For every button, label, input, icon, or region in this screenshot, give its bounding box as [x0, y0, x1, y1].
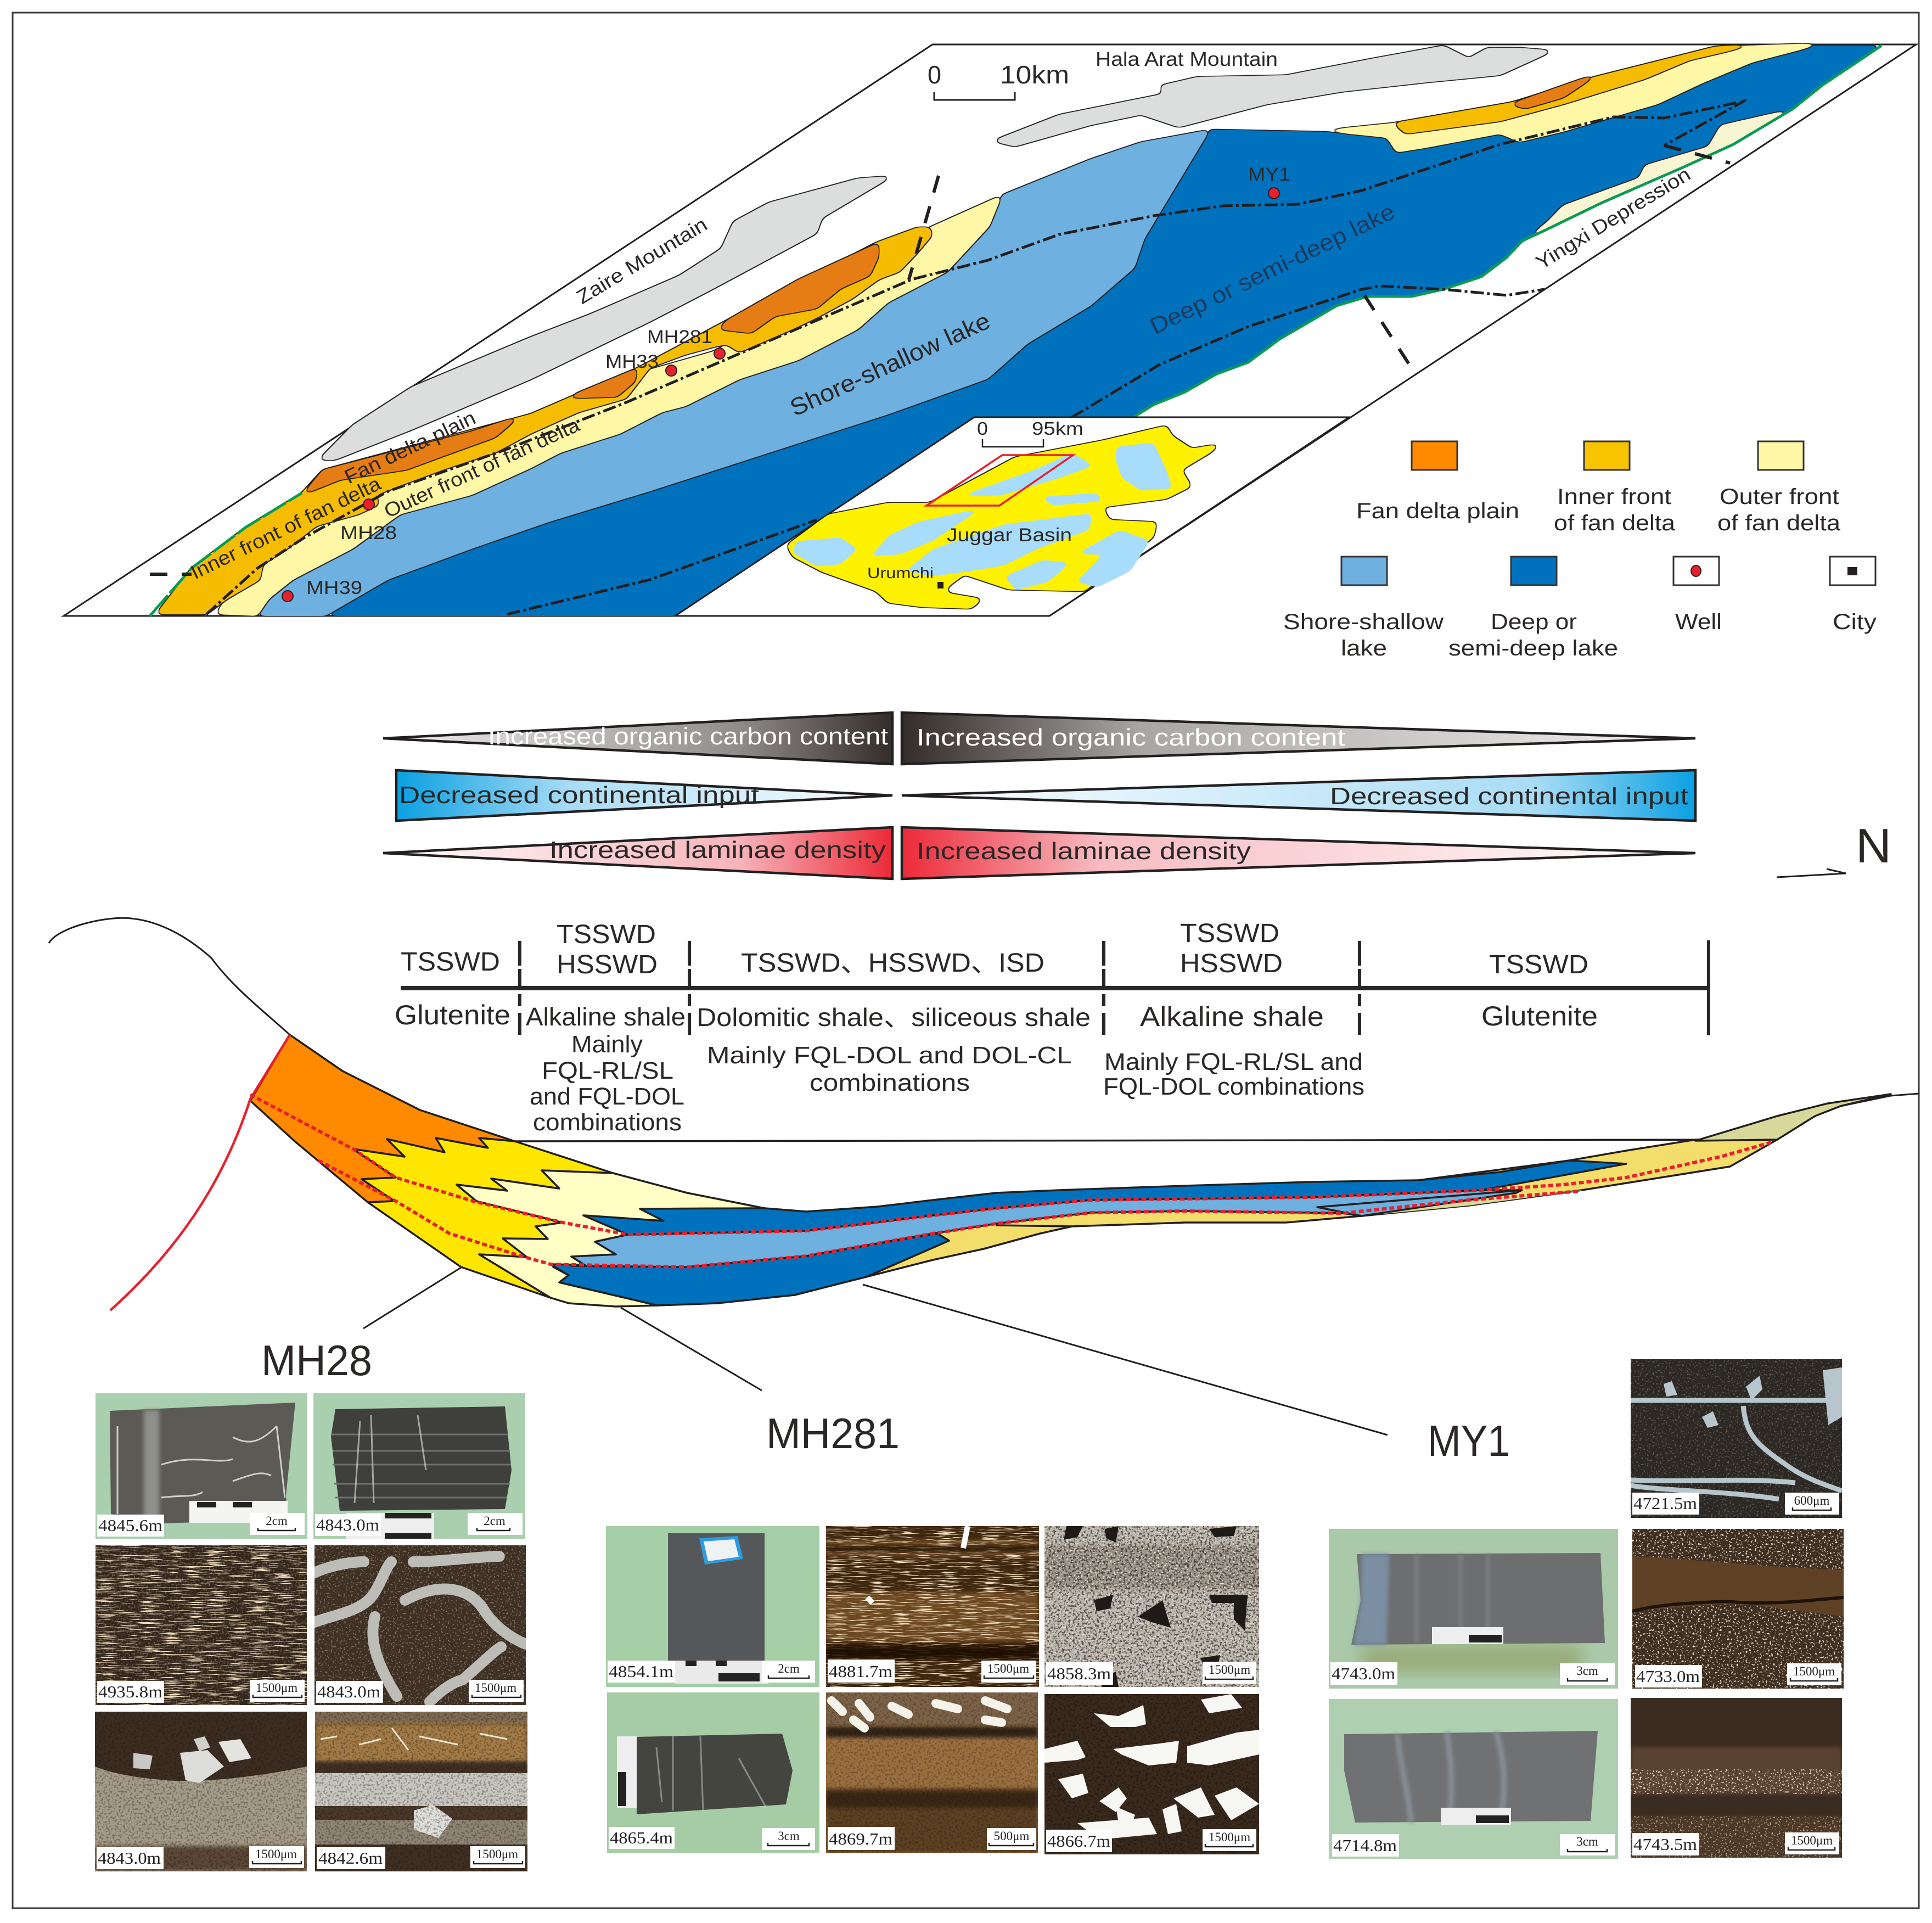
legend: inner front: Inner front — [1557, 485, 1671, 509]
photo 4845.6m — [96, 1393, 307, 1539]
photo 4843.0m vein: 4843.0m — [317, 1682, 380, 1701]
green west margin — [150, 493, 302, 616]
legend: city — [1830, 557, 1877, 634]
facies: deep or semi-deep lake — [325, 46, 1882, 616]
label: Yingxi Depression: Yingxi Depression — [1532, 162, 1694, 274]
panel: sedimentary facies map — [64, 43, 1916, 616]
facies: fan delta plain west — [302, 368, 638, 495]
basin outline — [787, 425, 1221, 609]
legend: fan delta plain: Fan delta plain — [1356, 499, 1519, 523]
map parallelogram outline — [64, 44, 1916, 616]
photo 4858.3m: 1500μm — [1209, 1663, 1250, 1677]
TSSWD HSSWD column 4: TSSWD — [1180, 919, 1279, 948]
facies: khaki distal wedge — [1695, 1094, 1891, 1141]
mountain profile — [49, 918, 290, 1035]
TSSWD HSSWD column 2: TSSWD — [557, 920, 656, 949]
red dashed upper boundary — [250, 1095, 1771, 1235]
photo 4858.3m — [1044, 1526, 1259, 1687]
photo 4714.8m core — [1329, 1699, 1618, 1859]
photo 4866.7m — [1044, 1694, 1259, 1854]
facies: fan delta plain central — [718, 243, 879, 333]
legend: outer front: Outer front — [1720, 485, 1839, 509]
well MH281: MH281 — [647, 327, 712, 347]
photo 4733.0m: 1500μm — [1793, 1664, 1835, 1678]
photo 4843.0m vein — [314, 1545, 526, 1705]
panel: Juggar Basin inset map — [675, 417, 1349, 616]
wedge: laminae density right: Increased laminae density — [917, 838, 1251, 865]
mountain: Zaire — [318, 176, 894, 460]
photo 4843.0m crystals: 1500μm — [255, 1847, 297, 1861]
photo 4935.8m: 1500μm — [256, 1681, 297, 1695]
photo 4854.1m: 2cm — [778, 1662, 800, 1675]
panel: MH281 core photos — [606, 1526, 1259, 1854]
inset scale bar: 0 — [977, 418, 988, 439]
combinations column 4: Mainly FQL-RL/SL and — [1104, 1049, 1363, 1075]
photo 4843.0m crystals — [95, 1712, 307, 1871]
wedge: organic carbon right: Increased organic carbon content — [917, 724, 1345, 751]
photo 4843.0m crystals: 4843.0m — [98, 1848, 161, 1868]
combinations column 3: Mainly FQL-DOL and DOL-CL — [707, 1042, 1072, 1069]
photo 4743.5m: 1500μm — [1791, 1834, 1833, 1847]
scale bar 10 km: 10km — [1000, 60, 1069, 89]
facies: eastern outer front — [1317, 43, 1828, 153]
wedge: continental input left: Decreased continental input — [399, 782, 759, 809]
legend: well: Well — [1675, 610, 1722, 634]
Dolomitic and siliceous shale: Dolomitic shale、siliceous shale — [697, 1003, 1091, 1031]
label: Shore-shallow lake: Shore-shallow lake — [786, 307, 995, 422]
well label MY1: MY1 — [1428, 1416, 1510, 1465]
label: Zaire Mountain: Zaire Mountain — [572, 213, 711, 309]
well MH281 — [647, 327, 725, 359]
wedge: continental input right: Decreased continental input — [1330, 783, 1688, 810]
photo 4842.6m: 1500μm — [476, 1847, 518, 1861]
dash-dot arrow east — [1664, 100, 1746, 145]
inset scale bar: 95km — [1032, 418, 1083, 439]
photo 4865.4m — [607, 1692, 819, 1853]
legend: inner front: of fan delta — [1554, 511, 1676, 535]
legend: inner front — [1554, 441, 1676, 535]
legend: shore-shallow lake: lake — [1341, 636, 1387, 660]
lake level line — [515, 1140, 1777, 1141]
legend: shore-shallow lake: Shore-shallow — [1283, 610, 1444, 634]
photo 4733.0m — [1632, 1529, 1844, 1689]
label: Outer front of fan delta: Outer front of fan delta — [380, 413, 583, 522]
photo 4845.6m: 4845.6m — [98, 1516, 162, 1535]
photo 4881.7m — [826, 1526, 1039, 1687]
well MY1 — [1248, 164, 1290, 199]
photo 4721.5m: 600μm — [1794, 1494, 1829, 1507]
leader line MY1 — [863, 1285, 1388, 1435]
facies: deep lake lower body — [551, 1234, 949, 1305]
well MH39: MH39 — [306, 578, 362, 598]
facies: fan outer pale — [457, 1170, 765, 1307]
photo 4869.7m: 4869.7m — [829, 1829, 892, 1848]
photo 4721.5m — [1631, 1359, 1842, 1518]
column dividers — [520, 941, 1360, 1035]
legend: city: City — [1833, 610, 1877, 634]
basin floor profile — [1840, 1094, 1919, 1106]
photo 4881.7m: 4881.7m — [829, 1662, 892, 1681]
wedge: organic carbon left: Increased organic carbon content — [488, 723, 888, 750]
photo 4843.0m vein: 1500μm — [475, 1681, 516, 1695]
photo 4842.6m: 4842.6m — [318, 1848, 383, 1868]
facies: inner front of fan delta — [156, 227, 933, 614]
Glutenite right: Glutenite — [1481, 1001, 1598, 1031]
panel: lithology table — [395, 919, 1709, 1136]
dash-dot boundary north — [206, 102, 1739, 614]
facies: fan inner yellow — [353, 1138, 613, 1298]
photo 4842.6m — [315, 1712, 527, 1871]
photo 4858.3m: 4858.3m — [1047, 1664, 1111, 1683]
wedge: continental input right — [902, 770, 1695, 821]
wedge: laminae density right — [902, 827, 1695, 879]
facies: outer front of fan delta — [216, 195, 1002, 616]
photo 4935.8m: 4935.8m — [98, 1682, 162, 1701]
combinations column 2: combinations — [533, 1109, 682, 1136]
combinations column 2: FQL-RL/SL — [542, 1057, 673, 1084]
facies: fan delta plain — [250, 1035, 515, 1202]
label: Juggar Basin: Juggar Basin — [947, 525, 1072, 546]
combinations column 4: FQL-DOL combinations — [1103, 1073, 1364, 1100]
legend: well — [1673, 557, 1722, 634]
well label MH281: MH281 — [766, 1409, 900, 1457]
photo 4714.8m core: 4714.8m — [1333, 1836, 1397, 1855]
photo 4881.7m: 1500μm — [987, 1662, 1029, 1675]
legend: shore-shallow lake — [1283, 557, 1444, 660]
inset background — [675, 417, 1349, 616]
table end line — [1707, 940, 1710, 1035]
facies: shore-shallow lake — [257, 130, 1210, 616]
Alkaline shale right: Alkaline shale — [1140, 1001, 1324, 1032]
label: Inner front of fan delta: Inner front of fan delta — [187, 472, 385, 584]
legend: fan delta plain — [1356, 441, 1519, 523]
leader line MH281 — [621, 1308, 762, 1391]
photo 4935.8m — [96, 1545, 307, 1705]
combinations column 2: Mainly — [571, 1031, 643, 1058]
well MY1: MY1 — [1248, 164, 1290, 185]
facies: sand tail — [866, 1140, 1777, 1277]
wedge: laminae density left — [383, 827, 892, 879]
photo 4854.1m — [606, 1526, 819, 1687]
photo 4854.1m: 4854.1m — [609, 1662, 673, 1681]
facies: shore-shallow band — [571, 1190, 1522, 1267]
well MH28: MH28 — [340, 523, 397, 543]
combinations column 2: and FQL-DOL — [530, 1083, 684, 1110]
city marker — [937, 582, 943, 588]
panel: basin cross-section — [49, 918, 1919, 1465]
photo 4714.8m core: 3cm — [1576, 1835, 1598, 1848]
fault dashes — [150, 145, 1730, 574]
combinations column 4 — [1103, 1049, 1364, 1100]
facies: eastern fan delta plain — [1509, 71, 1603, 109]
Alkaline shale left: Alkaline shale — [526, 1002, 686, 1031]
photo 4743.5m — [1631, 1698, 1842, 1858]
panel: map legend — [1283, 441, 1877, 660]
red dashed lower boundary — [318, 1160, 1579, 1267]
panel: MY1 core photos — [1329, 1359, 1844, 1859]
photo 4843.0m core — [313, 1393, 525, 1539]
well MH39 — [282, 578, 362, 602]
label: Fan delta plain: Fan delta plain — [341, 406, 479, 488]
combinations column 2 — [530, 1031, 684, 1136]
dash-dot boundary south east — [1072, 286, 1545, 417]
TSSWD column 1: TSSWD — [401, 948, 500, 977]
basin lakes — [793, 442, 1172, 590]
photo 4865.4m: 4865.4m — [610, 1828, 673, 1847]
photo 4869.7m: 500μm — [994, 1829, 1029, 1843]
table axis — [401, 986, 1708, 990]
well MH33: MH33 — [605, 351, 659, 372]
TSSWD HSSWD column 2: HSSWD — [557, 950, 658, 979]
photo 4843.0m core: 4843.0m — [316, 1515, 379, 1534]
north arrow: N — [1856, 818, 1891, 873]
photo 4866.7m: 1500μm — [1209, 1830, 1250, 1844]
facies: deep lake band — [583, 1160, 1626, 1235]
Glutenite left: Glutenite — [395, 1000, 510, 1030]
photo 4733.0m: 4733.0m — [1636, 1667, 1700, 1686]
green basin margin — [1133, 46, 1882, 417]
red boundary fault — [110, 1035, 290, 1310]
photo 4866.7m: 4866.7m — [1047, 1831, 1110, 1851]
photo 4743.0m core: 4743.0m — [1332, 1664, 1395, 1683]
TSSWD HSSWD column 4: HSSWD — [1180, 949, 1283, 978]
panel: MH28 core photos — [95, 1393, 527, 1871]
facies: eastern inner front — [1393, 43, 1765, 134]
wedge: organic carbon right — [902, 713, 1695, 764]
scale bar 10 km — [928, 60, 1069, 100]
well label MH28: MH28 — [261, 1336, 372, 1384]
combinations column 3 — [707, 1042, 1072, 1096]
well MH33 — [605, 351, 677, 376]
north arrow — [1777, 818, 1891, 877]
study area red box — [926, 455, 1073, 506]
legend: deep lake: Deep or — [1491, 610, 1577, 634]
legend: deep lake — [1448, 557, 1618, 660]
dash-dot boundary south — [507, 520, 817, 614]
TSSWD HSSWD column 4 — [1180, 919, 1283, 978]
facies: khaki lower wedge — [1349, 1190, 1582, 1216]
legend: outer front — [1717, 441, 1841, 535]
wedge: organic carbon left — [383, 713, 892, 764]
label: Urumchi: Urumchi — [867, 564, 934, 581]
label: Deep or semi-deep lake: Deep or semi-deep lake — [1145, 198, 1399, 339]
thin wedge line — [996, 1190, 1522, 1226]
legend: outer front: of fan delta — [1717, 511, 1841, 535]
well MH28 — [340, 499, 397, 543]
panel: trend wedges — [383, 713, 1695, 879]
scale bar 10 km: 0 — [928, 60, 941, 89]
photo 4843.0m core: 2cm — [484, 1514, 506, 1528]
photo 4721.5m: 4721.5m — [1633, 1494, 1697, 1513]
facies: pale Yingxi fan — [1522, 109, 1793, 241]
photo 4869.7m — [826, 1692, 1038, 1853]
photo 4845.6m: 2cm — [266, 1514, 288, 1528]
legend: deep lake: semi-deep lake — [1448, 636, 1618, 660]
depositional types column 3: TSSWD、HSSWD、ISD — [741, 949, 1044, 978]
photo 4743.5m: 4743.5m — [1633, 1835, 1697, 1854]
TSSWD column 5: TSSWD — [1489, 950, 1588, 979]
mountain: Hala Arat — [992, 46, 1554, 147]
wedge: continental input left — [396, 770, 892, 821]
wedge: laminae density left: Increased laminae density — [549, 837, 886, 864]
photo 4865.4m: 3cm — [778, 1829, 800, 1843]
combinations column 3: combinations — [810, 1069, 970, 1096]
TSSWD HSSWD column 2 — [557, 920, 658, 979]
label: Hala Arat Mountain: Hala Arat Mountain — [1096, 48, 1278, 70]
photo 4743.0m core: 3cm — [1576, 1664, 1598, 1678]
photo 4743.0m core — [1329, 1529, 1618, 1689]
inset scale bar — [977, 418, 1083, 447]
leader line MH28 — [363, 1268, 461, 1328]
